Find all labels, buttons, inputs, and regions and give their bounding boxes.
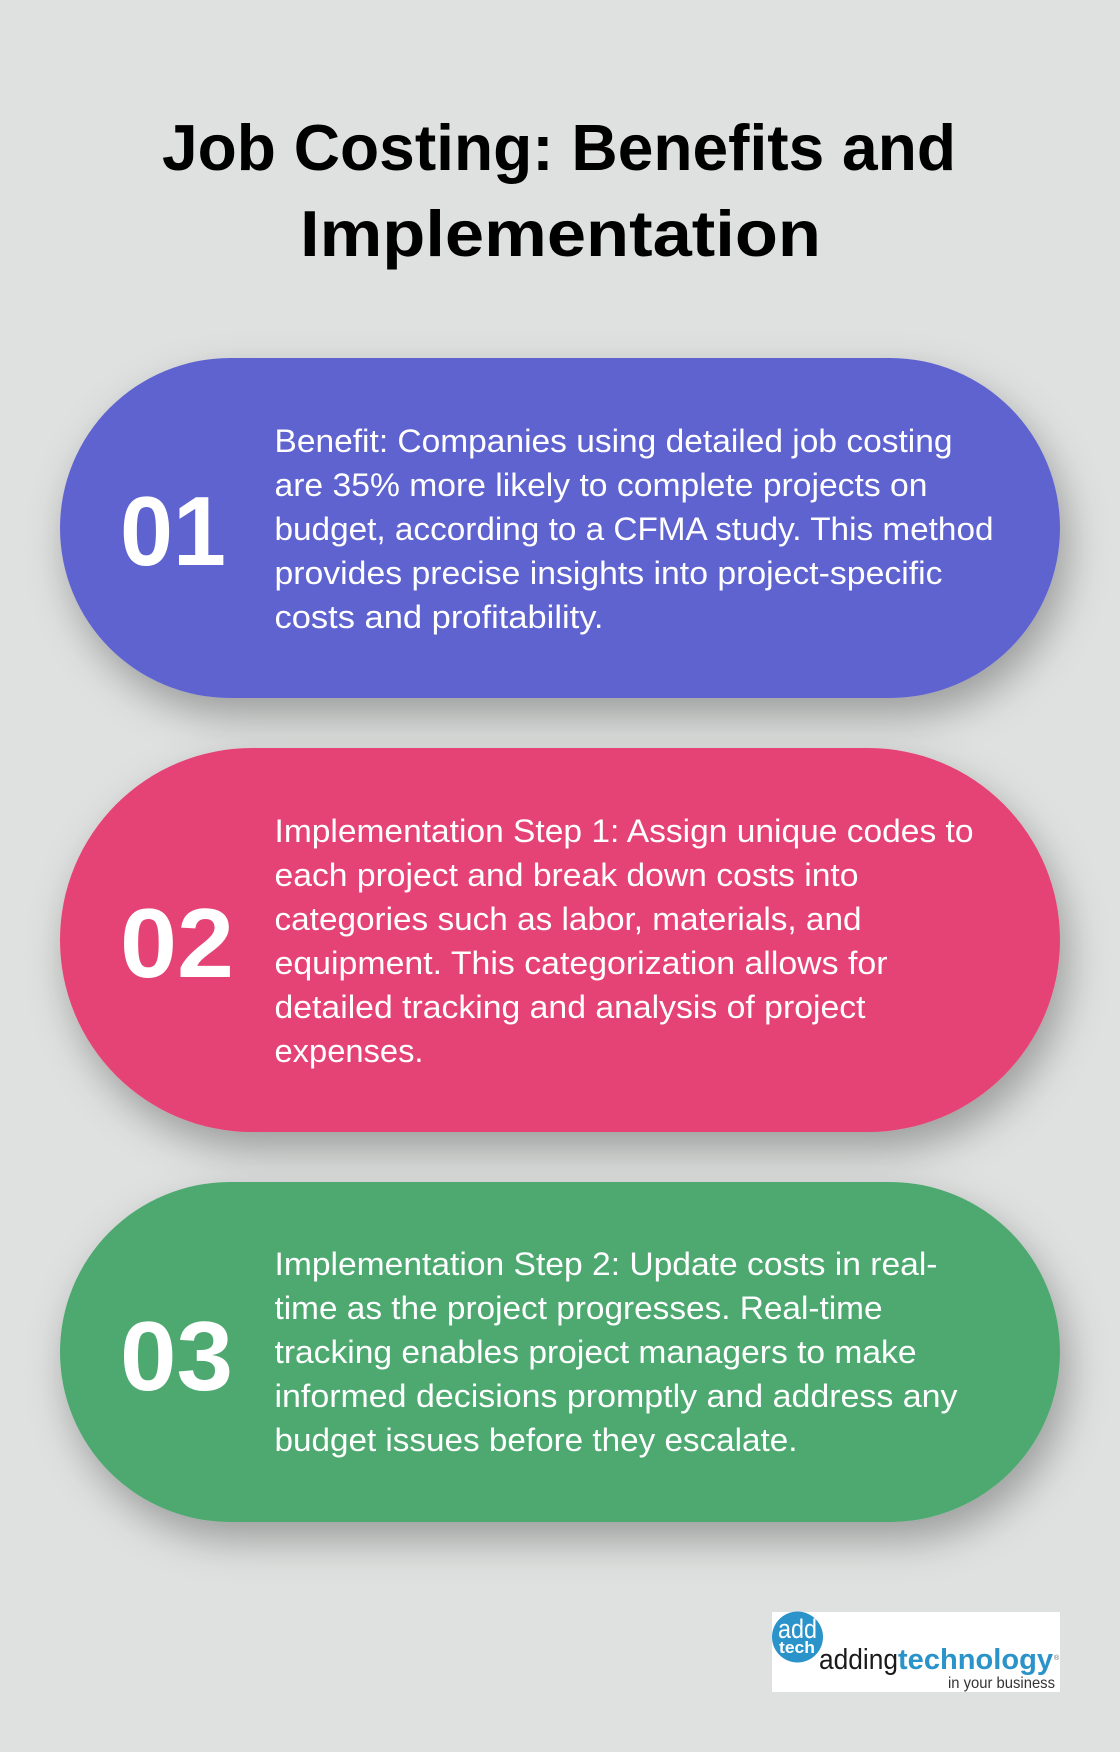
text block 03 xyxy=(274,1246,958,1458)
text block 01 xyxy=(274,423,994,635)
text block 01: are 35% more likely to complete projects on xyxy=(274,467,928,503)
panel: step 01 benefit xyxy=(60,358,1060,698)
pill background 03 xyxy=(60,1182,1060,1522)
text block 02: detailed tracking and analysis of project xyxy=(274,989,866,1025)
number 01: 01 xyxy=(120,476,226,586)
number 03: 03 xyxy=(120,1301,233,1411)
text block 01: budget, according to a CFMA study. This method xyxy=(274,511,994,547)
panel: step 02 implementation xyxy=(60,748,1060,1132)
text block 02: each project and break down costs into xyxy=(274,857,858,893)
text block 03: budget issues before they escalate. xyxy=(274,1422,798,1458)
logo wordmark: adding xyxy=(819,1644,898,1676)
icon: add tech badge: tech xyxy=(779,1638,815,1657)
pill background 02 xyxy=(60,748,1060,1132)
logo wordmark: technology xyxy=(898,1644,1053,1676)
panel: step 03 implementation xyxy=(60,1182,1060,1522)
text block 02: categories such as labor, materials, and xyxy=(274,901,862,937)
icon: add tech badge: add xyxy=(778,1614,817,1644)
logo wordmark: ® xyxy=(1054,1654,1060,1662)
icon: add tech badge xyxy=(772,1612,823,1662)
text block 03: informed decisions promptly and address any xyxy=(274,1378,958,1414)
text block 02 xyxy=(274,813,974,1069)
text block 03: Implementation Step 2: Update costs in real- xyxy=(274,1246,938,1282)
title: Job Costing: Benefits and xyxy=(162,111,956,184)
title xyxy=(162,111,956,270)
pill background 01 xyxy=(60,358,1060,698)
logo: adding technology xyxy=(772,1612,1060,1692)
text block 02: expenses. xyxy=(274,1033,424,1069)
text block 02: equipment. This categorization allows for xyxy=(274,945,888,981)
text block 01: provides precise insights into project-specific xyxy=(274,555,942,591)
title: Implementation xyxy=(300,197,821,270)
text block 03: tracking enables project managers to make xyxy=(274,1334,916,1370)
text block 02: Implementation Step 1: Assign unique codes to xyxy=(274,813,974,849)
logo wordmark xyxy=(819,1644,1060,1676)
text block 03: time as the project progresses. Real-time xyxy=(274,1290,882,1326)
number 02: 02 xyxy=(120,888,234,998)
logo tagline: in your business xyxy=(948,1675,1055,1692)
logo background xyxy=(772,1612,1060,1692)
text block 01: Benefit: Companies using detailed job costing xyxy=(274,423,952,459)
text block 01: costs and profitability. xyxy=(274,599,604,635)
